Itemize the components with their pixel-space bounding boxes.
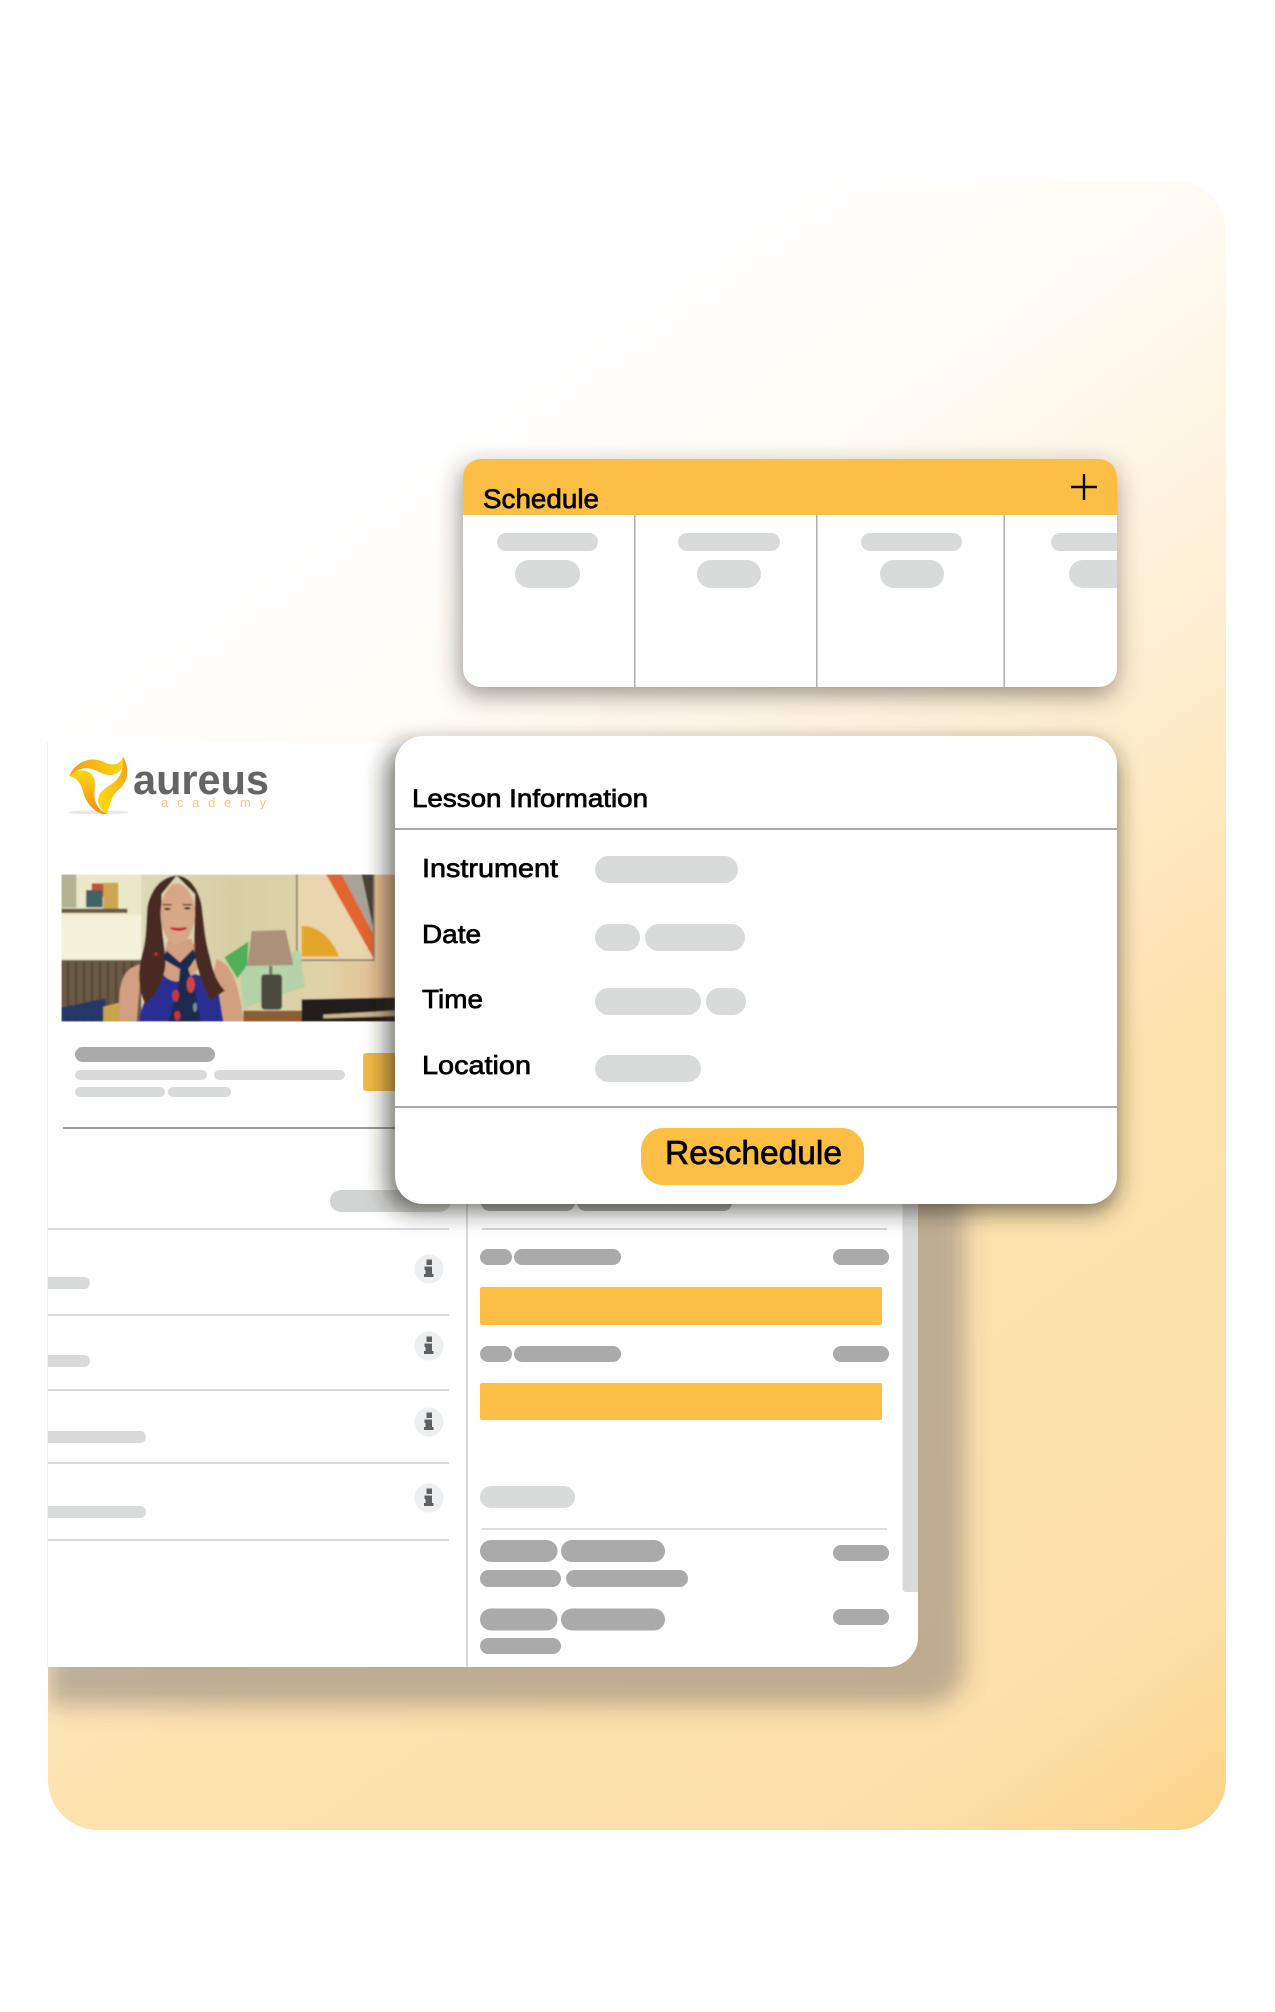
- list panel: lessons with info icons: [48, 1190, 451, 1541]
- photo: teacher in living room: [61, 874, 395, 1022]
- icon: info: [414, 1408, 444, 1436]
- illustration: app mockup on gradient panel: [47, 181, 1226, 1830]
- background gradient panel: [48, 181, 1226, 1830]
- right column: timetable: [480, 1190, 918, 1654]
- field: location: [422, 1050, 701, 1082]
- field: date: [422, 919, 745, 951]
- field: date: Date: [422, 919, 481, 949]
- lesson heading: Lesson Information: [412, 785, 648, 813]
- icon: info: [414, 1254, 444, 1284]
- yellow lesson bar: [480, 1383, 882, 1420]
- field: location: Location: [422, 1050, 531, 1080]
- schedule heading: Schedule: [483, 484, 599, 514]
- reschedule button: [641, 1128, 864, 1185]
- panel: schedule card: [460, 459, 1151, 695]
- teacher details placeholder text: [75, 1047, 345, 1097]
- field: time: Time: [422, 984, 483, 1014]
- field: instrument: Instrument: [422, 853, 559, 883]
- logo: aureus academy: academy: [161, 795, 266, 810]
- teacher figure: [119, 876, 243, 1022]
- panel shadow: main dashboard: [48, 1204, 978, 1721]
- logo: aureus academy: aureus: [133, 756, 269, 803]
- icon: info: [414, 1484, 444, 1512]
- yellow lesson bar: [480, 1287, 882, 1325]
- logo: aureus academy: [68, 756, 269, 814]
- icon: info: [414, 1332, 444, 1360]
- panel: main dashboard: [47, 742, 918, 1667]
- field: time: [422, 984, 746, 1015]
- yellow button partly hidden: [363, 1053, 408, 1091]
- field: instrument: [422, 853, 738, 883]
- scrollbar: [902, 1190, 918, 1592]
- reschedule button: Reschedule: [665, 1134, 842, 1171]
- panel: lesson information card: [386, 736, 1117, 1212]
- logo mark: [68, 757, 128, 814]
- icon: plus: [1071, 474, 1097, 500]
- schedule grid: [463, 459, 1151, 687]
